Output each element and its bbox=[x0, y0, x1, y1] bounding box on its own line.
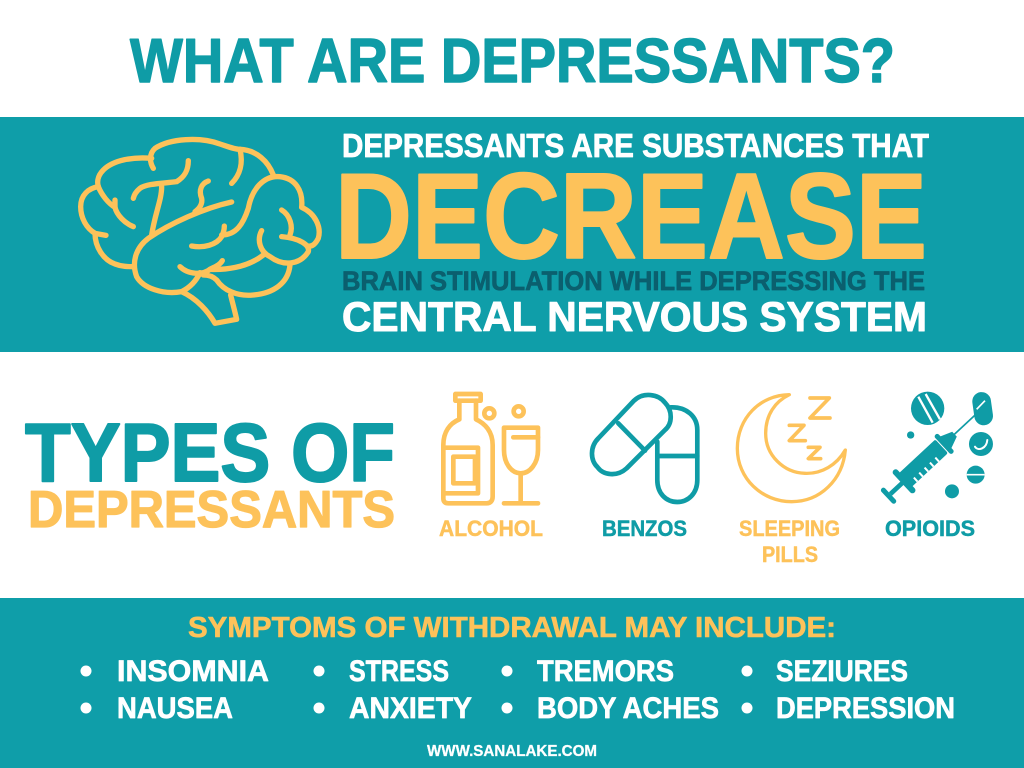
list: symptoms column 2: ANXIETY bbox=[349, 692, 472, 725]
list: symptoms column 3: BODY ACHES bbox=[537, 692, 719, 725]
label: alcohol: ALCOHOL bbox=[439, 516, 543, 541]
list: symptoms column 4: DEPRESSION bbox=[776, 692, 955, 725]
list: symptoms column 4: SEZIURES bbox=[776, 655, 908, 688]
list: symptoms column 1: INSOMNIA bbox=[117, 655, 269, 688]
icon: capsules bbox=[592, 395, 697, 502]
heading: symptoms: SYMPTOMS OF WITHDRAWAL MAY INCLUDE: bbox=[188, 612, 836, 644]
text: central nervous system: CENTRAL NERVOUS SYSTEM bbox=[342, 293, 927, 340]
label: opioids: OPIOIDS bbox=[885, 516, 975, 541]
label: benzos: BENZOS bbox=[602, 516, 687, 541]
panel: definition bbox=[0, 117, 1024, 352]
list: symptoms column 1: NAUSEA bbox=[117, 692, 233, 725]
list: symptoms column 2 bbox=[314, 655, 472, 725]
text: decrease: DECREASE bbox=[335, 148, 927, 284]
text: brain stimulation line: BRAIN STIMULATION WHILE DEPRESSING THE bbox=[342, 266, 925, 296]
item: benzos bbox=[592, 395, 697, 541]
item: alcohol bbox=[439, 394, 543, 541]
list: symptoms column 3 bbox=[502, 655, 719, 725]
text: website: WWW.SANALAKE.COM bbox=[427, 743, 597, 760]
list: symptoms column 2: STRESS bbox=[349, 655, 449, 688]
icon: syringe and pills bbox=[876, 391, 997, 509]
icon: moon and z's bbox=[737, 395, 845, 502]
item: opioids bbox=[876, 391, 997, 541]
label: sleeping pills: PILLS bbox=[762, 542, 818, 567]
list: symptoms column 4 bbox=[742, 655, 955, 725]
heading: types of depressants: DEPRESSANTS bbox=[28, 481, 395, 539]
heading: types of depressants: TYPES OF bbox=[25, 406, 395, 499]
text: intro line: DEPRESSANTS ARE SUBSTANCES THAT bbox=[342, 127, 929, 164]
list: symptoms column 1 bbox=[80, 655, 269, 725]
label: sleeping pills: SLEEPING bbox=[739, 516, 840, 541]
icon: bottle and glass bbox=[443, 394, 538, 503]
heading: types of depressants bbox=[25, 406, 395, 539]
icon: brain bbox=[81, 139, 319, 323]
list: symptoms column 3: TREMORS bbox=[537, 655, 674, 688]
item: sleeping pills bbox=[737, 395, 845, 567]
label: sleeping pills bbox=[739, 516, 840, 567]
title: WHAT ARE DEPRESSANTS? bbox=[130, 27, 895, 96]
panel: symptoms of withdrawal bbox=[0, 598, 1024, 768]
